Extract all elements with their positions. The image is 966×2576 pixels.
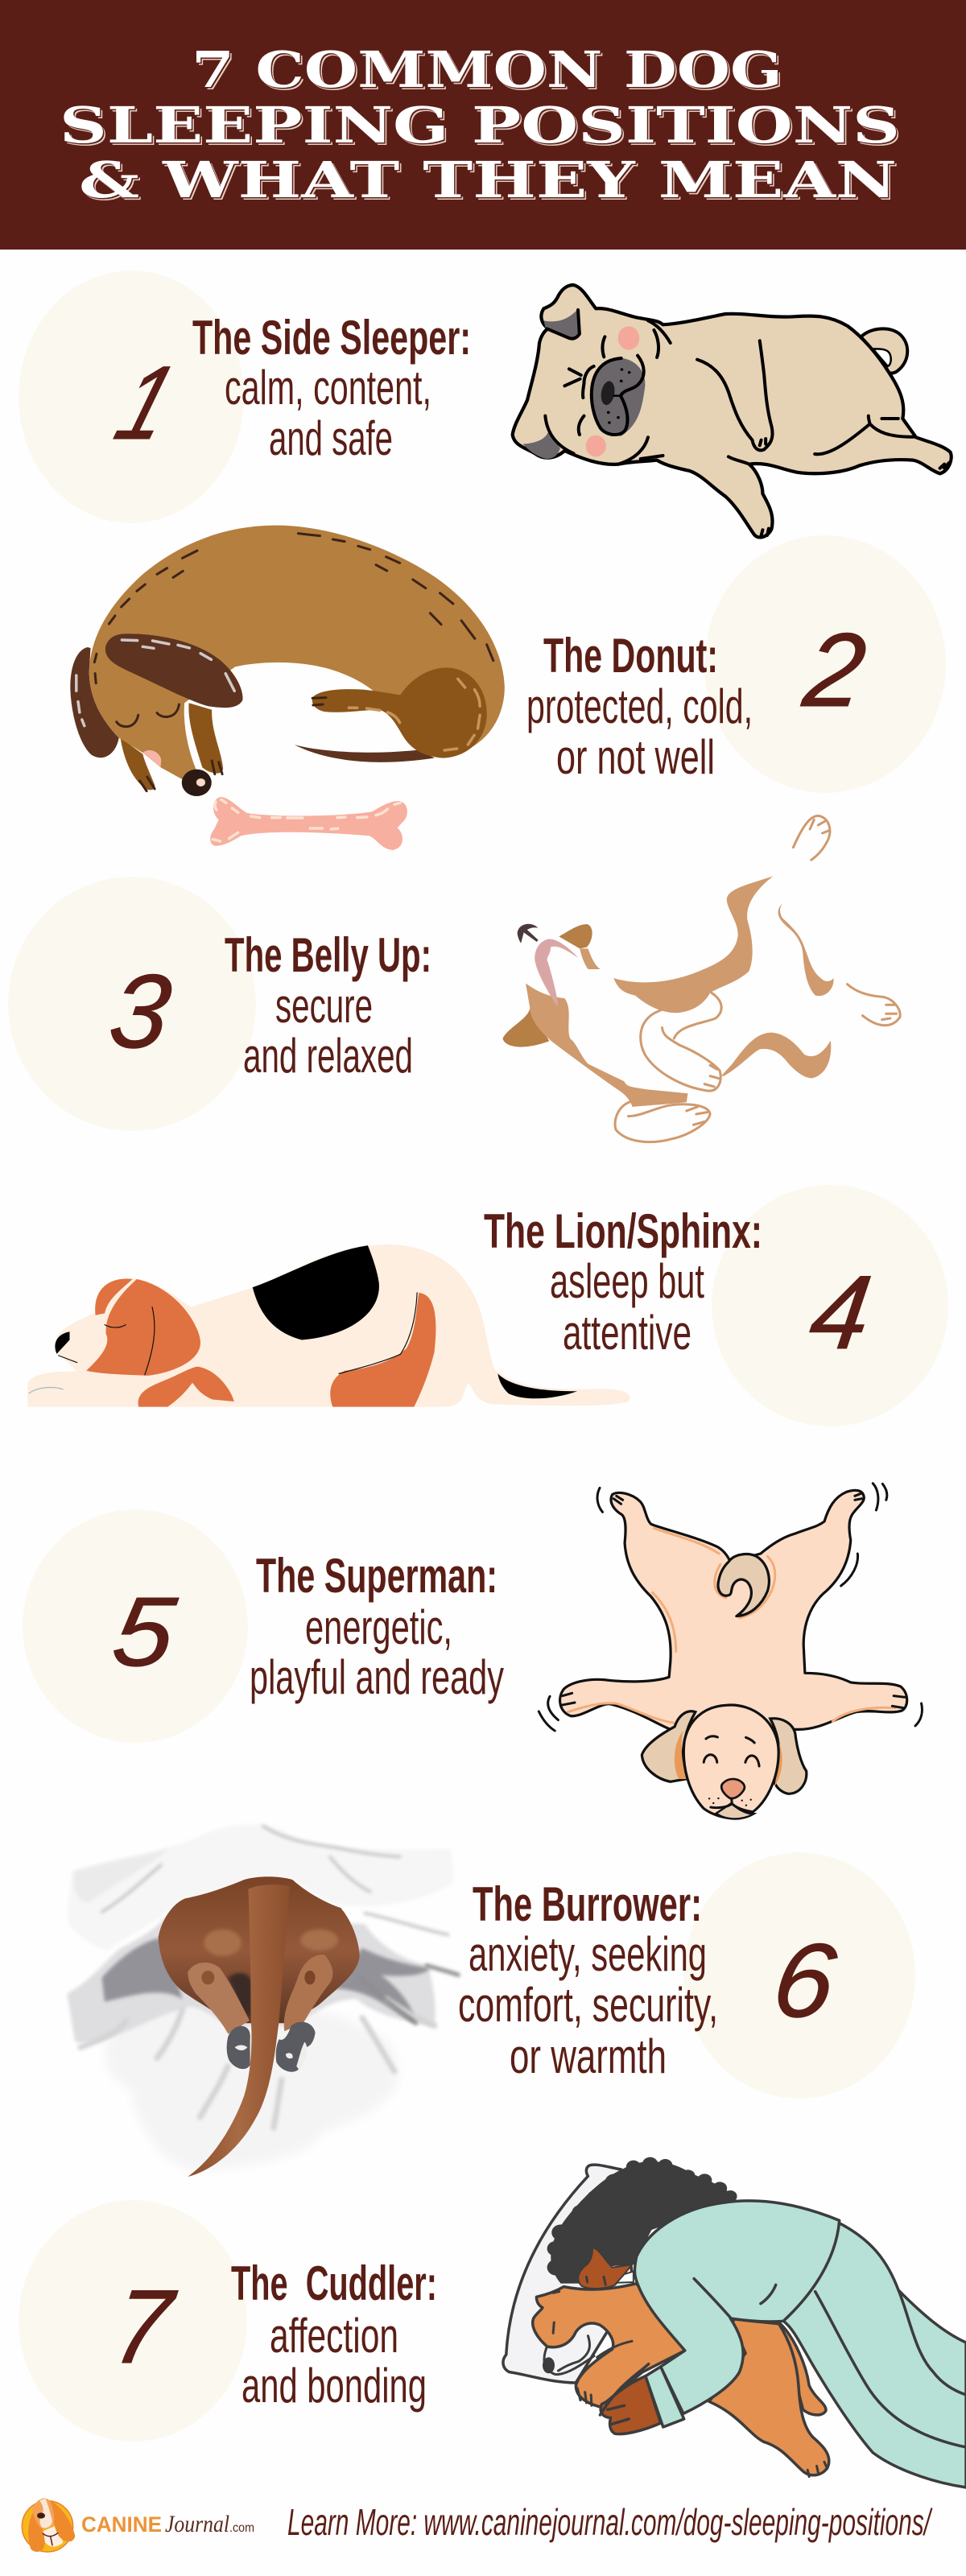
text: superman: playful and ready [250, 1650, 504, 1704]
illustration: dog lying belly up [502, 815, 900, 1142]
number badge 3: 3 [103, 953, 178, 1070]
panel: 5 superman [23, 1484, 922, 1818]
bone [210, 797, 407, 850]
logo: Canine Journal [22, 2498, 254, 2552]
text: lion sphinx: asleep but [550, 1254, 704, 1308]
number badge 5: 5 [106, 1576, 182, 1686]
text: burrower [458, 1877, 718, 2083]
title: 7 COMMON DOG [194, 43, 785, 101]
text: superman: energetic, [305, 1600, 452, 1654]
logo: Canine Journal: .com [229, 2521, 254, 2535]
panel: 2 donut [70, 526, 946, 850]
number badge 1: 1 [104, 345, 188, 461]
text: side sleeper: The Side Sleeper: [192, 311, 471, 365]
illustration: person cuddling dog [503, 2157, 966, 2487]
illustration: beagle in sphinx pose [27, 1245, 630, 1407]
text: lion sphinx [484, 1204, 762, 1360]
panel: 3 belly up [8, 815, 900, 1142]
title: & WHAT THEY MEAN [80, 151, 898, 211]
text: side sleeper: calm, content, [225, 361, 431, 415]
number badge 7: 7 [107, 2268, 182, 2385]
illustration: pug on its side [513, 285, 952, 538]
text: cuddler: affection [270, 2309, 398, 2363]
text: burrower: anxiety, seeking [469, 1927, 707, 1981]
text: belly up: secure [275, 979, 373, 1033]
title: & WHAT THEY MEAN [79, 151, 897, 209]
text: superman: The Superman: [256, 1549, 497, 1603]
number badge 4 [712, 1185, 948, 1426]
text: belly up [225, 928, 431, 1083]
illustration: puppy splayed flat [539, 1484, 922, 1818]
title: SLEEPING POSITIONS [61, 97, 902, 156]
title: 7 COMMON DOG [192, 40, 782, 99]
icon: basset hound badge [22, 2498, 75, 2552]
panel: 4 lion sphinx [27, 1185, 948, 1426]
text: side sleeper [192, 311, 471, 465]
text: lion sphinx: The Lion/Sphinx: [484, 1204, 762, 1258]
illustration: dog burrowed under blanket [67, 1825, 458, 2177]
text: donut: The Donut: [543, 629, 718, 683]
number badge 2: 2 [797, 612, 873, 729]
text: donut [526, 629, 753, 784]
text: burrower: The Burrower: [473, 1877, 702, 1931]
text: donut: protected, cold, [526, 679, 753, 733]
title: SLEEPING POSITIONS [62, 98, 902, 157]
number badge 2 [704, 535, 946, 793]
title [60, 40, 902, 212]
title: SLEEPING POSITIONS [60, 96, 900, 155]
number badge 5 [23, 1509, 248, 1743]
header banner [0, 0, 966, 250]
text: cuddler [231, 2256, 437, 2413]
panel: 1 side sleeper [19, 270, 952, 538]
number badge 1 [19, 270, 244, 523]
text: cuddler: and bonding [242, 2359, 427, 2413]
text: burrower: or warmth [510, 2029, 667, 2083]
footer [22, 2498, 933, 2552]
text: cuddler: The Cuddler: [231, 2256, 437, 2310]
text: lion sphinx: attentive [563, 1306, 691, 1360]
illustration: curled dachshund with bone [70, 526, 505, 850]
number badge 6: 6 [766, 1922, 843, 2039]
panel: 6 burrower [67, 1825, 915, 2177]
text: side sleeper: and safe [269, 411, 393, 465]
text: belly up: The Belly Up: [225, 928, 431, 982]
title: & WHAT THEY MEAN [81, 153, 899, 212]
logo: Canine Journal: CANINE [81, 2512, 162, 2537]
panel: 7 cuddler [19, 2157, 966, 2487]
logo: Canine Journal: Journal [165, 2511, 229, 2537]
number badge 6 [683, 1852, 915, 2099]
text: belly up: and relaxed [243, 1029, 413, 1083]
text: donut: or not well [556, 730, 715, 784]
number badge 4: 4 [803, 1254, 878, 1371]
number badge 3 [8, 877, 256, 1131]
number badge 7 [19, 2200, 247, 2442]
text: burrower: comfort, security, [458, 1978, 718, 2032]
text: superman [250, 1549, 504, 1704]
title: 7 COMMON DOG [193, 42, 784, 100]
